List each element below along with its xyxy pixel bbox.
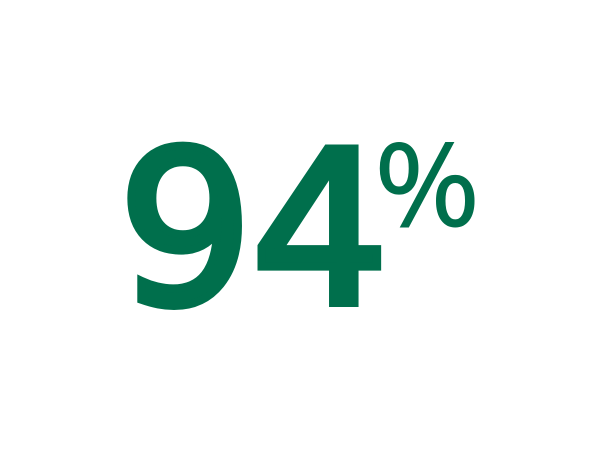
number: 94: 4 [251,106,389,353]
percent sign: % [376,97,478,257]
number: 94: 9 [118,106,253,353]
number: 94 [118,106,389,353]
